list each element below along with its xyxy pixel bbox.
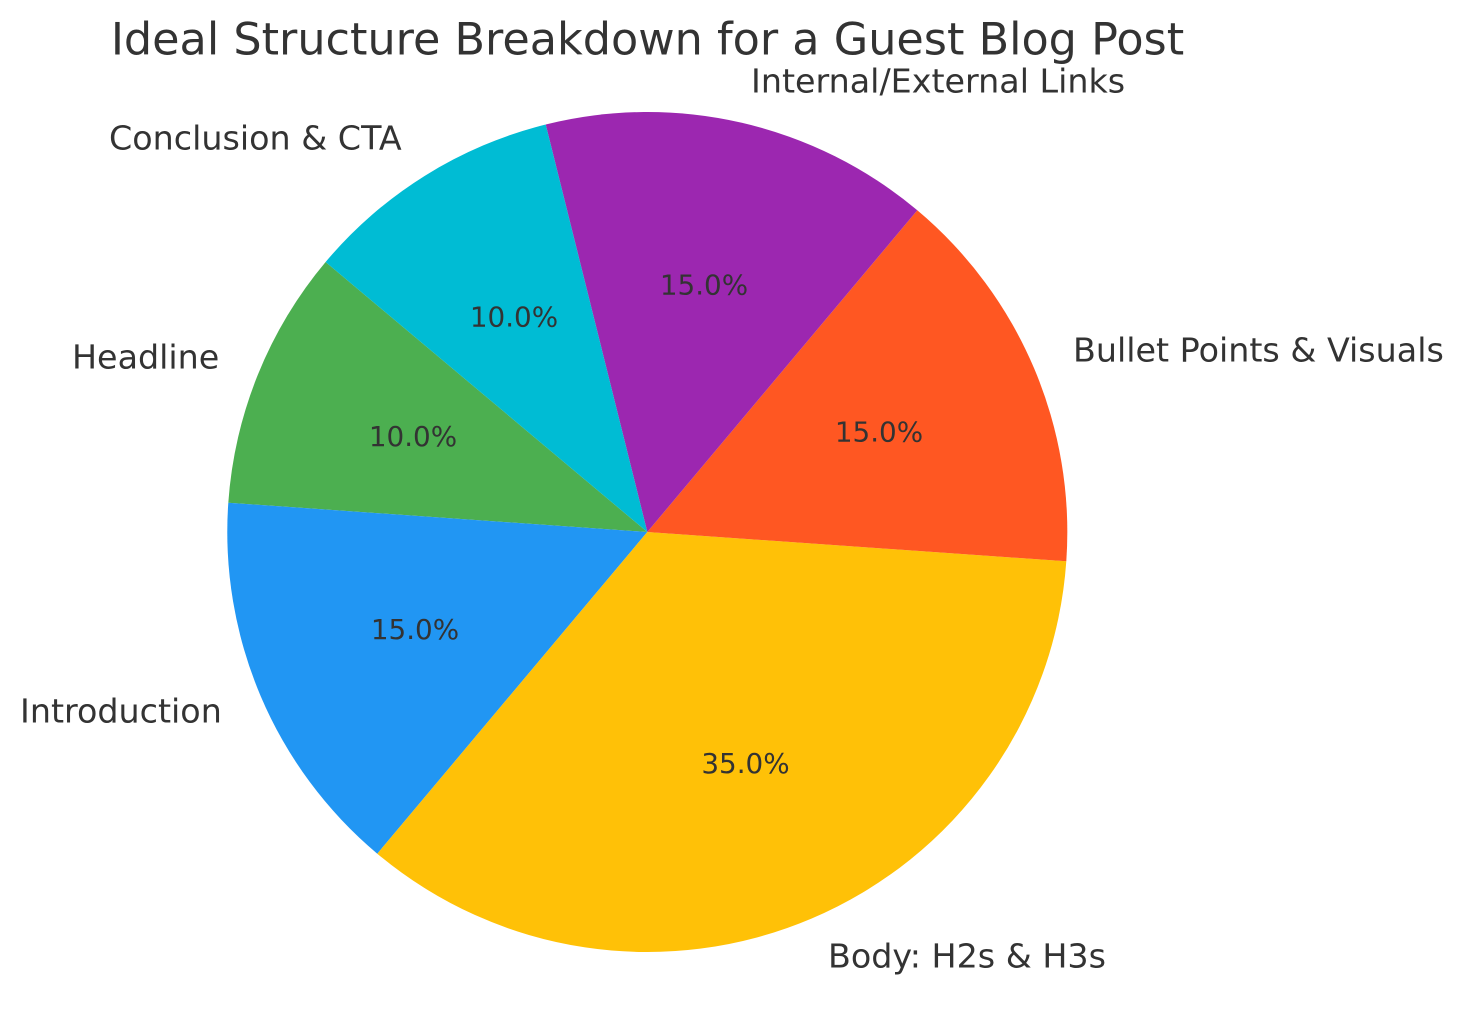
label: Conclusion & CTA: Conclusion & CTA [109, 118, 402, 158]
label: Body: Body: H2s & H3s [828, 936, 1106, 976]
slice: Links [546, 112, 917, 532]
slice: Conclusion [326, 124, 647, 532]
percent: Links: 15.0% [660, 268, 748, 302]
percent: Body: 35.0% [701, 747, 790, 780]
slice: Headline [228, 262, 647, 532]
label: Bullet Points & Visuals: Bullet Points & Visuals [1073, 330, 1444, 370]
label: Headline: Headline [72, 338, 219, 376]
percent: Bullets: 15.0% [835, 416, 923, 448]
percentage labels [369, 268, 923, 780]
percent: Conclusion: 10.0% [470, 300, 558, 334]
percent: Headline: 10.0% [369, 420, 457, 453]
percent: Introduction: 15.0% [371, 613, 459, 646]
slice: Bullet Points [647, 210, 1067, 561]
slice: Body [377, 532, 1066, 952]
slice: Introduction [227, 503, 647, 854]
pie slices [227, 112, 1067, 952]
label: Internal/External Links: Internal/External Links [751, 62, 1125, 100]
title: Ideal Structure Breakdown for a Guest Blog Post [111, 14, 1184, 66]
label: Introduction: Introduction [20, 692, 222, 730]
